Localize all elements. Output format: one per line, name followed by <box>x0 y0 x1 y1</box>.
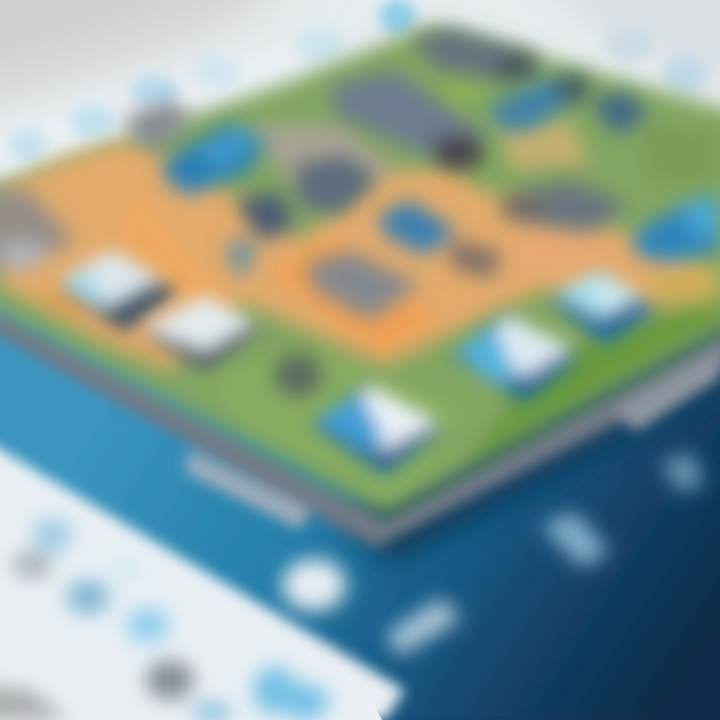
building: right cluster <box>505 180 630 232</box>
light strip on edge <box>185 450 310 530</box>
block: front left <box>58 250 178 332</box>
block: front second <box>145 295 262 372</box>
building: centre lower <box>235 192 295 242</box>
platform top: orange ground <box>0 120 720 370</box>
top strip icons: pale blue blobs <box>8 0 707 163</box>
block: far right <box>550 270 655 345</box>
platform side edge <box>0 290 720 548</box>
block: right centre <box>452 312 580 402</box>
water labels: pale pills <box>282 452 705 656</box>
bottom-left white panel <box>0 390 405 720</box>
building: back solar array <box>330 70 485 172</box>
block: front centre <box>312 382 442 475</box>
building: middle square <box>305 250 420 320</box>
building: left-top grey <box>120 100 195 152</box>
light edge label <box>615 350 720 432</box>
grey building clusters <box>0 28 650 397</box>
white and blue solar blocks <box>58 250 655 475</box>
building: small centre right <box>445 240 500 278</box>
platform top: green ground <box>0 25 720 515</box>
building: far right <box>590 92 650 135</box>
blue buildings <box>165 74 720 262</box>
water panel <box>0 280 720 720</box>
panel icons <box>0 517 329 720</box>
building: small dark lower <box>274 353 322 397</box>
building: centre <box>295 155 378 215</box>
building: top row <box>410 28 540 85</box>
building: left edge <box>0 185 75 270</box>
